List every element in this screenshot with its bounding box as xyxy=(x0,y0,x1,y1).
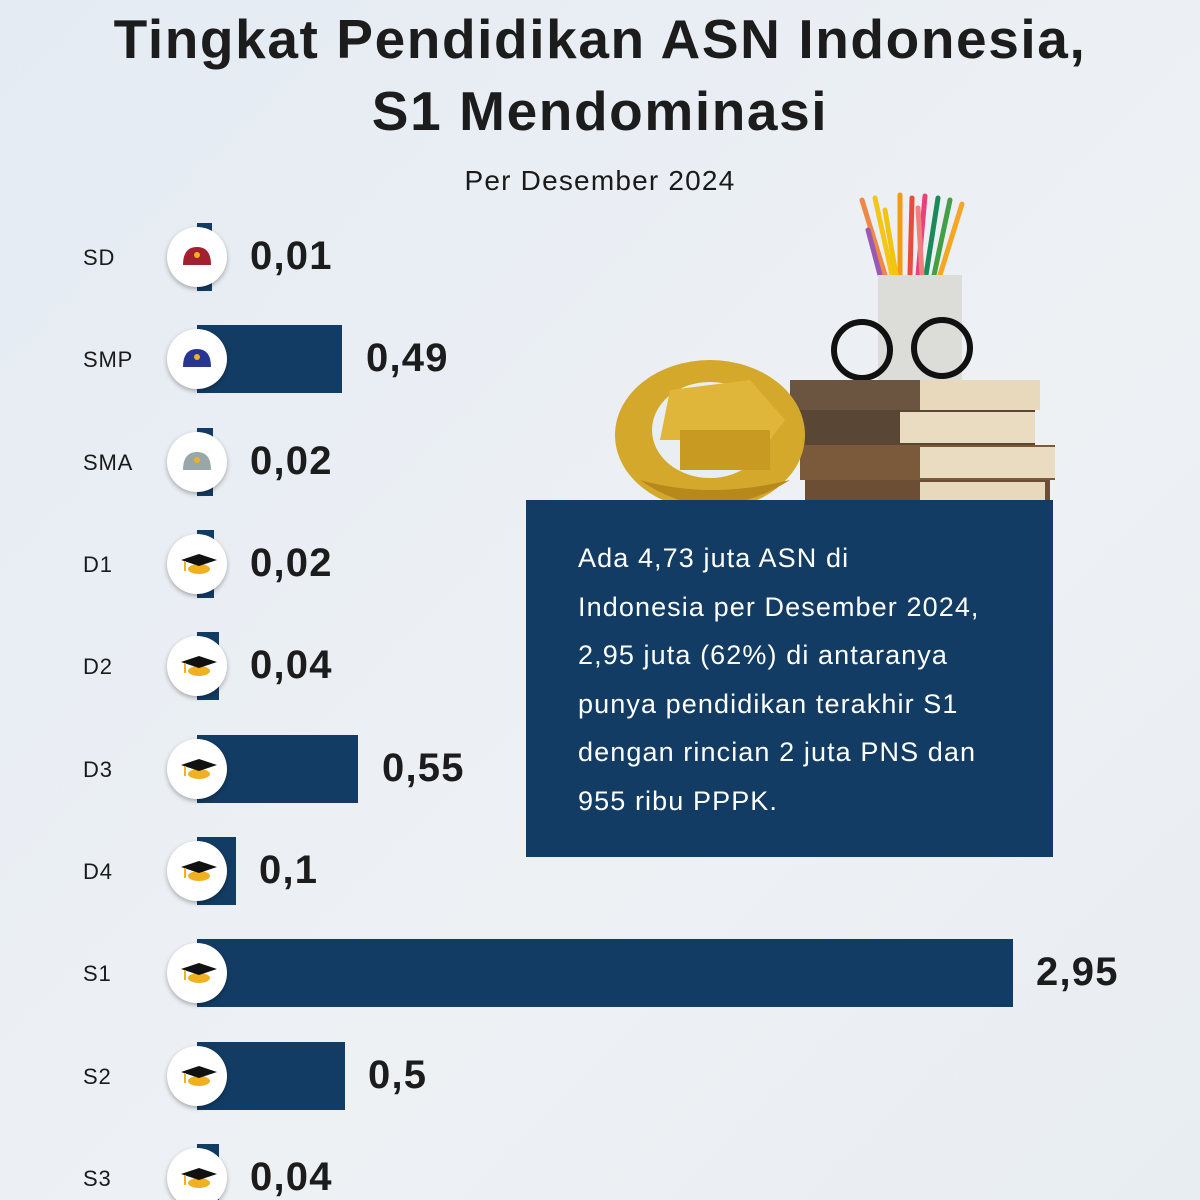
icon: red cap xyxy=(167,227,227,287)
icon: grey cap xyxy=(167,432,227,492)
row: S1: S1 xyxy=(83,961,112,986)
row: D4: 0,1 xyxy=(259,848,318,892)
row: D1 xyxy=(83,530,333,598)
row: SD: 0,01 xyxy=(250,234,333,278)
row: D2 xyxy=(83,632,333,700)
row: D3 xyxy=(83,735,465,804)
subtitle: Per Desember 2024 xyxy=(464,165,735,196)
title xyxy=(114,8,1086,142)
row: D1: 0,02 xyxy=(250,541,333,585)
row: SD xyxy=(83,223,333,292)
callout box: 2,95 juta (62%) di antaranya xyxy=(578,640,948,670)
row: SMP xyxy=(83,325,449,394)
icon: graduation cap xyxy=(167,739,227,799)
row: SMP: SMP xyxy=(83,347,133,372)
row: D3: 0,55 xyxy=(382,746,465,790)
callout box xyxy=(526,500,1053,857)
icon: graduation cap xyxy=(167,534,227,594)
row: S2: S2 xyxy=(83,1064,112,1089)
row: S2 xyxy=(83,1042,427,1110)
callout box: Indonesia per Desember 2024, xyxy=(578,592,980,622)
icon: graduation cap xyxy=(167,1046,227,1106)
row: D2: D2 xyxy=(83,654,113,679)
title: Tingkat Pendidikan ASN Indonesia, xyxy=(114,8,1086,70)
row: SMA: 0,02 xyxy=(250,439,333,483)
row: S3: S3 xyxy=(83,1166,112,1191)
row: SD: SD xyxy=(83,245,115,270)
row: D3: D3 xyxy=(83,757,113,782)
row: S3: 0,04 xyxy=(250,1155,333,1199)
callout box: punya pendidikan terakhir S1 xyxy=(578,688,959,718)
row: D4: D4 xyxy=(83,859,113,884)
callout box: 955 ribu PPPK. xyxy=(578,786,778,816)
row: SMA xyxy=(83,428,333,496)
row: S1 xyxy=(83,939,1119,1008)
icon: graduation cap xyxy=(167,636,227,696)
row: S3 xyxy=(83,1144,333,1200)
icon: navy cap xyxy=(167,329,227,389)
icon: graduation cap xyxy=(167,841,227,901)
row: S1: 2,95 xyxy=(1036,950,1119,994)
row: SMP: 0,49 xyxy=(366,336,449,380)
row: S2: 0,5 xyxy=(368,1053,427,1097)
row: D2: 0,04 xyxy=(250,643,333,687)
callout box: Ada 4,73 juta ASN di xyxy=(578,543,849,573)
icon: graduation cap xyxy=(167,1148,227,1200)
callout box: dengan rincian 2 juta PNS dan xyxy=(578,737,976,767)
title: S1 Mendominasi xyxy=(372,80,828,142)
row: D1: D1 xyxy=(83,552,113,577)
icon: graduation cap xyxy=(167,943,227,1003)
illustration: books, pencils, glasses and emblem xyxy=(615,192,1055,500)
row: SMA: SMA xyxy=(83,450,133,475)
row: D4 xyxy=(83,837,318,906)
